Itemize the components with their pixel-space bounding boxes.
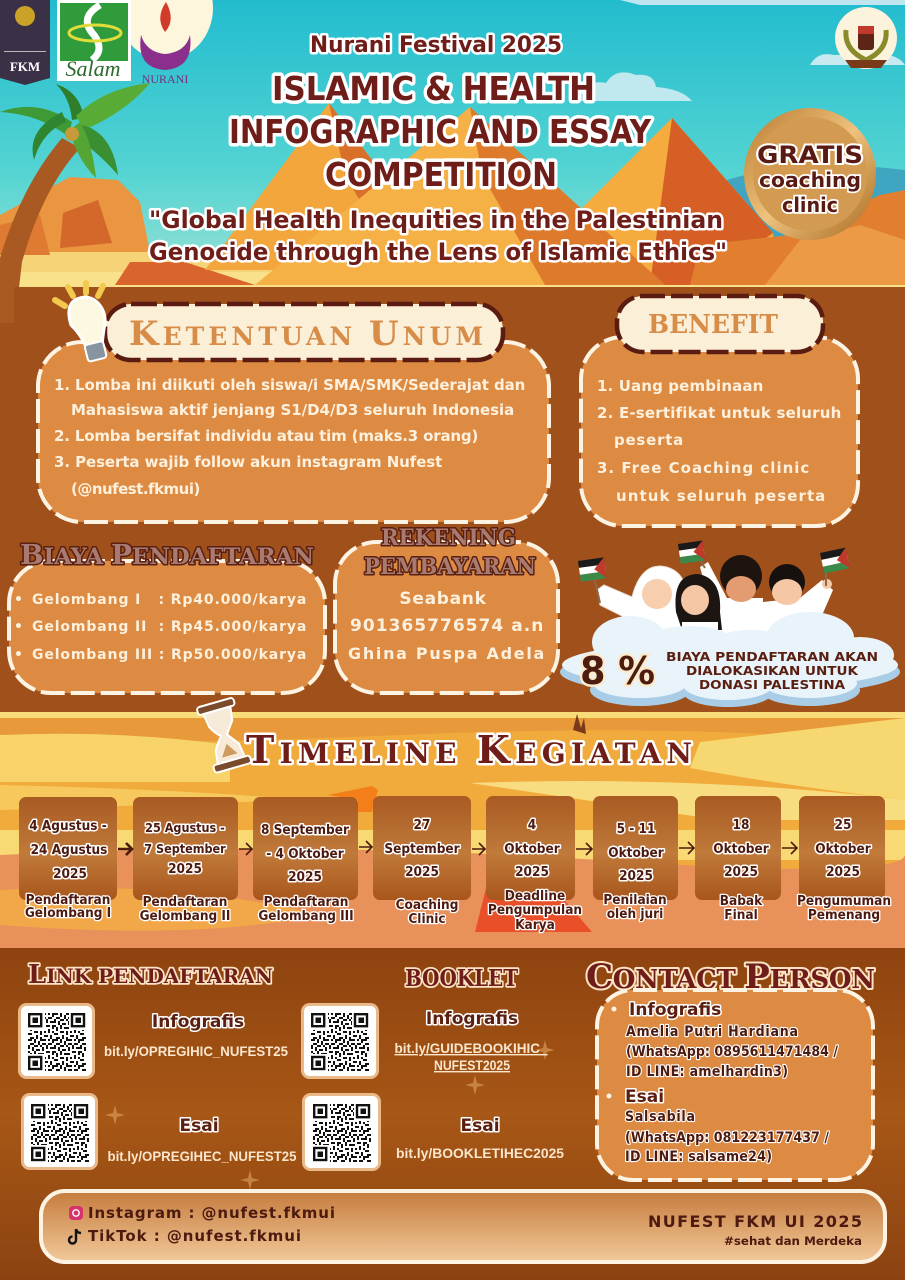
benefit list: untuk seluruh peserta bbox=[616, 487, 826, 505]
step 6 bbox=[593, 796, 678, 922]
donation text bbox=[666, 650, 878, 692]
contact: esai: Salsabila bbox=[625, 1109, 695, 1125]
step 1: 4 Agustus - bbox=[29, 818, 107, 834]
banner: ketentuan umum: KETENTUAN UNUM bbox=[129, 314, 483, 354]
rules list: Mahasiswa aktif jenjang S1/D4/D3 seluruh Indonesia bbox=[71, 401, 515, 419]
donation text: DIALOKASIKAN UNTUK bbox=[686, 664, 859, 678]
step 5: Pengumpulan bbox=[488, 902, 582, 918]
step 8: 2025 bbox=[826, 864, 860, 880]
step 7: Babak bbox=[720, 893, 763, 909]
header scene background bbox=[0, 0, 905, 330]
step 7: Oktober bbox=[713, 841, 769, 857]
rules list bbox=[54, 376, 526, 498]
link: booklet infografis: Infografis bbox=[426, 1009, 518, 1029]
step 3: Pendaftaran bbox=[264, 894, 348, 910]
step 1: 24 Agustus bbox=[31, 842, 107, 858]
link: booklet infografis bbox=[394, 1009, 548, 1073]
heading: timeline kegiatan: TIMELINE KEGIATAN bbox=[246, 727, 692, 772]
benefit list: peserta bbox=[614, 431, 684, 449]
cloud with donation note bbox=[560, 612, 900, 707]
step 8: Pemenang bbox=[808, 907, 880, 923]
contact: infografis: Infografis bbox=[629, 1000, 721, 1020]
title block bbox=[149, 33, 727, 266]
account details: 901365776574 a.n bbox=[350, 616, 544, 636]
palm tree bbox=[0, 83, 150, 330]
girl bbox=[675, 574, 722, 630]
contact: infografis: Amelia Putri Hardiana bbox=[626, 1024, 798, 1040]
step 6: oleh juri bbox=[607, 906, 663, 922]
theme subtitle bbox=[149, 206, 727, 266]
step 4: Clinic bbox=[408, 911, 446, 927]
contact: esai bbox=[625, 1087, 829, 1165]
logo: Nurani bbox=[140, 2, 190, 86]
step 6: Penilaian bbox=[603, 892, 667, 908]
hashtag: #sehat dan Merdeka bbox=[724, 1234, 862, 1248]
footer bar bbox=[41, 1191, 885, 1262]
step 8: 25 bbox=[835, 817, 851, 833]
donation text: DONASI PALESTINA bbox=[699, 678, 846, 692]
palm trunk base bbox=[0, 287, 14, 323]
rules list: 2. Lomba bersifat individu atau tim (maks.3 orang) bbox=[54, 427, 479, 445]
step 5: Karya bbox=[515, 917, 555, 933]
rules list: 1. Lomba ini diikuti oleh siswa/i SMA/SMK/Sederajat dan bbox=[54, 376, 526, 394]
step 6: 5 - 11 bbox=[617, 821, 655, 837]
step 2: 25 Agustus - bbox=[145, 820, 225, 835]
step 7: 2025 bbox=[724, 864, 758, 880]
step 5: Oktober bbox=[504, 841, 560, 857]
logo: Salam: Salam bbox=[66, 56, 120, 81]
benefit list: 3. Free Coaching clinic bbox=[597, 459, 810, 477]
heading: rekening pembayaran: PEMBAYARAN bbox=[364, 554, 536, 580]
theme subtitle: Genocide through the Lens of Islamic Ethics" bbox=[149, 238, 727, 266]
step 3: 8 September bbox=[261, 822, 349, 838]
badge: gratis coaching clinic: clinic bbox=[782, 193, 838, 217]
fee list: Gelombang III : Rp50.000/karya bbox=[32, 647, 307, 663]
step 8 bbox=[797, 796, 891, 923]
link: booklet infografis: NUFEST2025 bbox=[434, 1057, 510, 1073]
step 5 bbox=[486, 796, 582, 933]
hijab girl bbox=[597, 566, 690, 640]
step 8: Pengumuman bbox=[797, 893, 891, 909]
step 6: Oktober bbox=[608, 845, 664, 861]
contact: esai: Esai bbox=[625, 1087, 664, 1107]
step 4: 27 bbox=[414, 817, 430, 833]
link: booklet esai bbox=[396, 1116, 564, 1161]
heading: booklet: BOOKLET bbox=[405, 965, 518, 992]
fee list: • bbox=[14, 647, 24, 663]
panel: contact person bbox=[597, 990, 873, 1180]
step 4 bbox=[373, 796, 471, 927]
heading: contact person: CONTACT PERSON bbox=[586, 957, 875, 997]
curly-haired boy bbox=[700, 562, 763, 640]
step 6: 2025 bbox=[619, 868, 653, 884]
panel: ketentuan umum bbox=[38, 283, 549, 522]
icon: instagram bbox=[69, 1206, 83, 1220]
contact: esai: (WhatsApp: 081223177437 / bbox=[625, 1130, 829, 1146]
main title: COMPETITION bbox=[325, 155, 557, 194]
arrows between steps bbox=[118, 841, 797, 855]
step 4: Coaching bbox=[396, 897, 458, 913]
benefit list: 1. Uang pembinaan bbox=[597, 377, 764, 395]
fee list: Gelombang I : Rp40.000/karya bbox=[32, 592, 307, 608]
timeline steps bbox=[19, 796, 891, 933]
step 5: 4 bbox=[528, 817, 536, 833]
donation percentage: 8 % bbox=[580, 649, 655, 693]
link: registration esai: bit.ly/OPREGIHEC_NUFEST25 bbox=[108, 1148, 297, 1164]
step 2 bbox=[133, 797, 238, 924]
main title bbox=[229, 69, 652, 194]
panel: rekening pembayaran bbox=[335, 525, 558, 693]
link: registration infografis: bit.ly/OPREGIHIC_NUFEST25 bbox=[104, 1043, 288, 1059]
fee list: Gelombang II : Rp45.000/karya bbox=[32, 619, 307, 635]
instagram handle: Instagram : @nufest.fkmui bbox=[88, 1204, 335, 1222]
account details: Ghina Puspa Adela bbox=[348, 644, 545, 663]
boy on right bbox=[763, 580, 833, 640]
heading: link pendaftaran: LINK PENDAFTARAN bbox=[28, 960, 273, 990]
banner: ketentuan umum bbox=[105, 304, 503, 360]
link: booklet infografis: bit.ly/GUIDEBOOKIHIC_ bbox=[394, 1040, 548, 1056]
step 1: 2025 bbox=[53, 866, 87, 882]
badge: gratis coaching clinic: GRATIS bbox=[757, 141, 863, 169]
step 2: 7 September bbox=[144, 841, 226, 856]
heading: biaya pendaftaran: BIAYA PENDAFTARAN bbox=[20, 540, 314, 571]
badge: gratis coaching clinic: coaching bbox=[759, 168, 861, 192]
contact: esai: ID LINE: salsame24) bbox=[625, 1149, 772, 1165]
contact: infografis: ID LINE: amelhardin3) bbox=[626, 1064, 788, 1080]
step 3 bbox=[253, 797, 358, 924]
link: registration infografis bbox=[104, 1012, 288, 1059]
qr code: registration esai bbox=[22, 1094, 96, 1168]
logo: FKM UI bbox=[0, 0, 50, 85]
rules list: 3. Peserta wajib follow akun instagram Nufest bbox=[54, 453, 443, 471]
account details bbox=[348, 589, 545, 663]
banner: benefit bbox=[617, 296, 823, 352]
logo: Nufest bbox=[835, 7, 897, 69]
tiktok handle: TikTok : @nufest.fkmui bbox=[88, 1227, 301, 1245]
fee list bbox=[14, 592, 307, 663]
fee list: • bbox=[14, 592, 24, 608]
link: booklet esai: Esai bbox=[460, 1116, 500, 1136]
bottom band background bbox=[0, 948, 905, 1280]
footer brand: NUFEST FKM UI 2025 bbox=[648, 1212, 862, 1231]
contact: infografis: (WhatsApp: 0895611471484 / bbox=[626, 1044, 838, 1060]
festival name: Nurani Festival 2025 bbox=[310, 33, 562, 58]
step 2: Pendaftaran bbox=[143, 894, 227, 910]
main title: ISLAMIC & HEALTH bbox=[272, 69, 595, 108]
benefit list bbox=[597, 377, 842, 505]
banner: benefit: BENEFIT bbox=[648, 310, 779, 340]
fee list: • bbox=[14, 619, 24, 635]
heading: rekening pembayaran: REKENING bbox=[381, 525, 516, 551]
icon: hourglass bbox=[196, 697, 252, 773]
step 3: - 4 Oktober bbox=[266, 846, 344, 862]
panel: benefit bbox=[581, 296, 858, 526]
qr code: booklet infografis bbox=[302, 1004, 378, 1078]
account details: Seabank bbox=[399, 589, 487, 609]
link: registration esai: Esai bbox=[179, 1116, 219, 1136]
icon: tiktok bbox=[69, 1229, 81, 1244]
benefit list: 2. E-sertifikat untuk seluruh bbox=[597, 404, 842, 422]
logo: Nurani: NURANI bbox=[142, 72, 188, 86]
logo: Salam bbox=[57, 0, 131, 81]
step 8: Oktober bbox=[815, 841, 871, 857]
step 7: Final bbox=[724, 907, 758, 923]
step 5: 2025 bbox=[515, 864, 549, 880]
step 7: 18 bbox=[733, 817, 749, 833]
main title: INFOGRAPHIC AND ESSAY bbox=[229, 112, 652, 151]
donation text: BIAYA PENDAFTARAN AKAN bbox=[666, 650, 878, 664]
step 2: Gelombang II bbox=[140, 908, 230, 924]
step 7 bbox=[695, 796, 781, 923]
badge: gratis coaching clinic bbox=[744, 108, 876, 240]
step 4: 2025 bbox=[405, 864, 439, 880]
rules list: (@nufest.fkmui) bbox=[71, 480, 201, 498]
step 1 bbox=[19, 797, 117, 921]
heading: rekening pembayaran bbox=[364, 525, 536, 580]
qr code: registration infografis bbox=[20, 1004, 94, 1078]
timeline band background bbox=[0, 712, 905, 950]
step 5: Deadline bbox=[505, 888, 565, 904]
qr code: booklet esai bbox=[304, 1094, 380, 1170]
step 3: 2025 bbox=[288, 869, 322, 885]
information band background bbox=[0, 287, 905, 714]
theme subtitle: "Global Health Inequities in the Palestinian bbox=[149, 206, 723, 234]
illustration: children with flags bbox=[578, 541, 850, 644]
icon: light bulb bbox=[55, 283, 107, 362]
step 4: September bbox=[384, 841, 460, 857]
logo: FKM UI: FKM bbox=[10, 59, 40, 74]
step 2: 2025 bbox=[168, 861, 202, 877]
step 1: Gelombang I bbox=[25, 905, 111, 921]
link: registration infografis: Infografis bbox=[152, 1012, 244, 1032]
contact: infografis bbox=[626, 1000, 838, 1080]
step 3: Gelombang III bbox=[258, 908, 354, 924]
link: booklet esai: bit.ly/BOOKLETIHEC2025 bbox=[396, 1145, 564, 1161]
step 1: Pendaftaran bbox=[26, 892, 110, 908]
link: registration esai bbox=[108, 1116, 297, 1164]
panel: biaya pendaftaran bbox=[9, 540, 325, 693]
